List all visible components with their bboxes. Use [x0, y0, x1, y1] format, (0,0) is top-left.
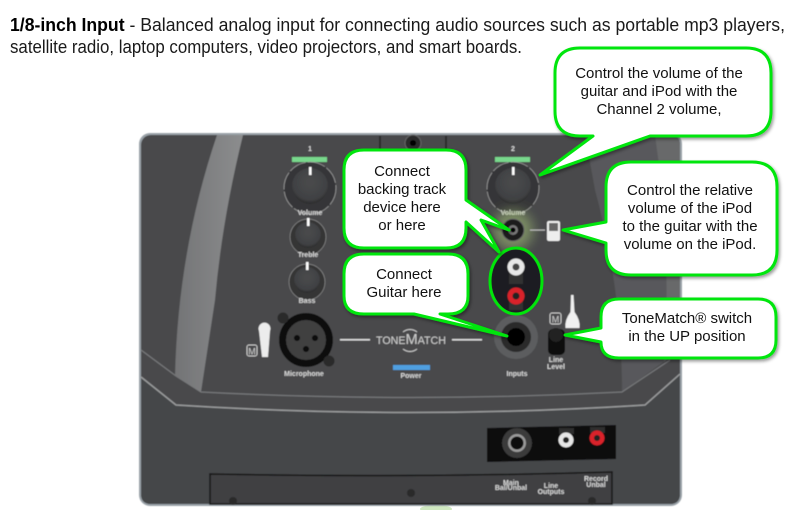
callout: channel 2 volume: Channel 2 volume, — [596, 101, 722, 118]
heading text — [10, 15, 785, 57]
callout: channel 2 volume: guitar and iPod with the — [581, 83, 737, 100]
tonematch logo — [340, 329, 482, 352]
channel 2 controls — [487, 146, 539, 217]
callout: tonematch switch: in the UP position — [628, 328, 746, 345]
lower recess with labels: Unbal — [586, 482, 606, 489]
RCA inputs — [491, 249, 541, 313]
callout: tonematch switch: ToneMatch® switch — [622, 310, 752, 327]
icon: tonematch M left — [247, 345, 257, 356]
lower recess with labels: Bal/Unbal — [495, 485, 527, 492]
callout: channel 2 volume — [540, 48, 771, 175]
callout: connect guitar: Guitar here — [366, 284, 442, 301]
callout: relative volume: volume on the iPod. — [624, 236, 756, 253]
lower recess with labels: Line — [544, 483, 558, 490]
callout: connect backing track: device here — [363, 199, 441, 216]
tonematch switch — [547, 328, 565, 371]
icon: iPod — [547, 221, 560, 241]
green glow below panel — [420, 505, 452, 510]
panel lower section — [141, 374, 680, 504]
panel diagonal band — [175, 135, 243, 392]
channel 2 controls: Volume — [501, 210, 525, 217]
line output box — [487, 425, 616, 462]
channel 1 controls: Volume — [298, 210, 322, 217]
callout: connect guitar: Connect — [376, 266, 433, 283]
inputs jack — [494, 315, 538, 378]
1/8-inch jack — [493, 210, 545, 250]
top connector — [380, 135, 446, 151]
oval highlight around RCA inputs — [490, 248, 542, 314]
inputs jack: Inputs — [506, 371, 528, 378]
callout: relative volume: Control the relative — [627, 182, 753, 199]
tonematch switch: Level — [547, 364, 565, 371]
channel 1 controls: Treble — [298, 252, 318, 259]
callout: connect backing track: Connect — [374, 163, 431, 180]
power indicator: Power — [400, 373, 422, 380]
tonematch switch: Line — [549, 357, 563, 364]
callout: connect backing track: or here — [378, 217, 426, 234]
lower recess with labels: Outputs — [538, 489, 565, 496]
panel: mixer control panel — [139, 133, 682, 506]
callout: connect backing track: backing track — [358, 181, 447, 198]
channel 2 controls: 2 — [511, 146, 515, 153]
callout: tonematch switch — [565, 299, 776, 358]
icon: tonematch M left: M — [248, 346, 256, 356]
channel 1 controls — [284, 146, 336, 305]
callout: connect guitar — [344, 254, 507, 336]
callout: relative volume: volume of the iPod — [628, 200, 752, 217]
heading text: satellite radio, laptop computers, video projectors, and smart boards. — [10, 37, 522, 57]
callout: relative volume — [563, 162, 777, 275]
channel 1 controls: Bass — [299, 298, 315, 305]
icon: tonematch M right: M — [552, 314, 559, 324]
icon: tonematch M right — [550, 313, 561, 324]
callout: relative volume: to the guitar with the — [622, 218, 758, 235]
icon: guitar — [565, 295, 580, 328]
tonematch logo: TONEMATCH — [376, 331, 446, 348]
channel 1 controls: 1 — [308, 146, 312, 153]
lower recess with labels — [210, 472, 612, 505]
heading text: 1/8-inch Input - Balanced analog input for connecting audio sources such as portable mp3 players, — [10, 15, 785, 35]
callout: channel 2 volume: Control the volume of the — [575, 65, 743, 82]
microphone input — [278, 312, 334, 378]
microphone input: Microphone — [284, 371, 324, 378]
callout: connect backing track — [344, 150, 509, 252]
icon: microphone — [258, 323, 270, 357]
panel lighter right side — [585, 135, 680, 392]
lower recess with labels: Main — [503, 480, 519, 487]
lower recess with labels: Record — [584, 476, 608, 483]
power indicator — [393, 365, 430, 380]
